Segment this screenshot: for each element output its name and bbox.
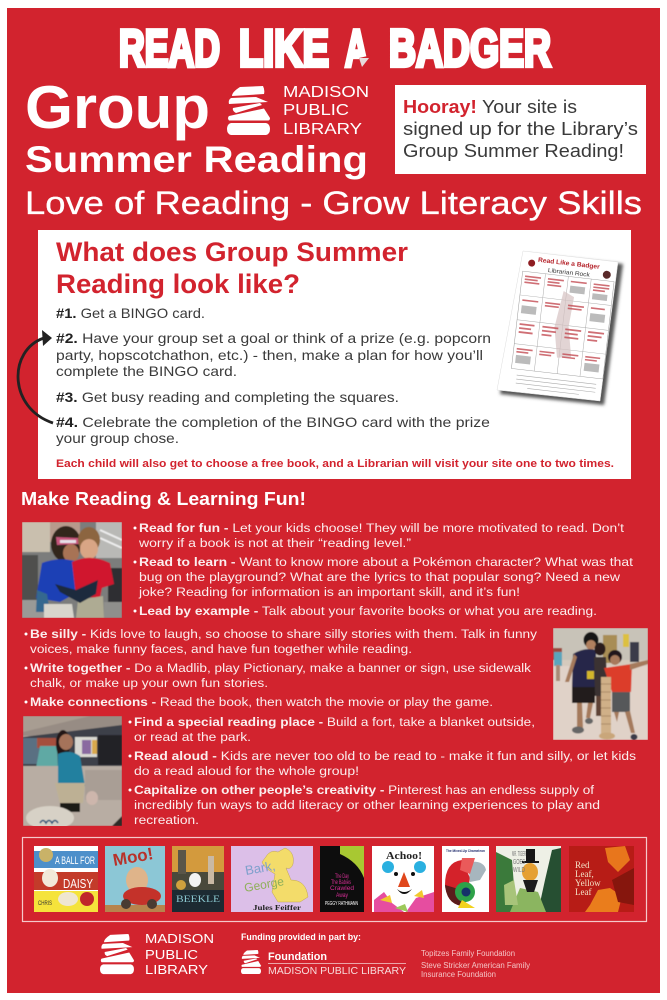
logo: Madison Public Library: LIBRARY xyxy=(283,121,362,138)
logo: Library Foundation: Foundation xyxy=(268,951,327,963)
book: Beekle: BEEKLE xyxy=(176,894,221,904)
callout: Hooray: Hooray! Your site is xyxy=(403,96,577,117)
book: Moo! xyxy=(105,844,165,912)
item: capitalize on creativity xyxy=(128,783,600,827)
item: be silly: Be silly - Kids love to laugh, so choose to share silly stories with them. Talk in funny xyxy=(30,627,538,641)
step 4: your group chose. xyxy=(56,431,179,446)
book: Mr. Tiger Goes Wild xyxy=(496,846,561,912)
item: be silly xyxy=(24,627,538,656)
heading: Summer Reading: Summer Reading xyxy=(25,139,368,180)
photo: kids with block tower xyxy=(553,628,648,740)
title: LIKE xyxy=(239,20,329,78)
funders list xyxy=(421,949,530,979)
list: read for fun, learn, lead xyxy=(134,521,634,618)
title: READ xyxy=(119,20,220,78)
logo: Madison Public Library: MADISON xyxy=(283,84,369,101)
item: read aloud: Read aloud - Kids are never too old to be read to - make it fun and silly, or let kids xyxy=(134,749,636,763)
item: write together xyxy=(24,661,532,690)
funders list: Steve Stricker American Family xyxy=(421,961,530,970)
item: read to learn xyxy=(134,555,634,599)
logo: footer Madison Public Library: MADISON xyxy=(145,931,214,946)
book: Red Leaf, Yellow Leaf xyxy=(569,846,634,912)
book: A Ball for Daisy: CHRIS xyxy=(38,901,52,907)
item: write together: Write together - Do a Madlib, play Pictionary, make a banner or sign, use sidewalk xyxy=(30,661,532,675)
book: The Mixed-Up Chameleon xyxy=(442,846,489,912)
funders list: Topitzes Family Foundation xyxy=(421,949,515,958)
book: The Day the Babies Crawled Away xyxy=(320,846,364,912)
book: A Ball for Daisy: A BALL FOR xyxy=(55,855,95,867)
book: Red Leaf, Yellow Leaf: Leaf, xyxy=(575,869,594,879)
book: The Day the Babies Crawled Away: The Day xyxy=(335,873,349,880)
item: read for fun: worry if a book is not at their “reading level.” xyxy=(138,536,411,550)
callout: Hooray: signed up for the Library’s xyxy=(403,118,638,139)
book: Beekle xyxy=(172,846,224,912)
book: A Ball for Daisy: DAISY xyxy=(63,876,93,891)
book: The Day the Babies Crawled Away: Crawled xyxy=(330,885,354,892)
item: capitalize on creativity: Capitalize on other people’s creativity - Pinterest has an endless supply of xyxy=(134,783,595,797)
logo: footer Madison Public Library: PUBLIC xyxy=(145,947,198,962)
book: Bark, George xyxy=(231,846,313,912)
logo: Madison Public Library: PUBLIC xyxy=(283,102,349,119)
bingo card illustration: Librarian Rock xyxy=(548,268,591,279)
book: Achoo!: Achoo! xyxy=(386,850,422,862)
item: lead by example: Lead by example - Talk about your favorite books or what you are reading. xyxy=(139,604,597,618)
step 4: #4. Celebrate the completion of the BINGO card with the prize xyxy=(56,415,490,430)
bingo card illustration: Read Like a Badger xyxy=(538,257,601,271)
logo: footer Madison Public Library xyxy=(100,931,214,977)
book: Bark, George: Jules Feiffer xyxy=(253,904,301,912)
title: A xyxy=(345,20,368,78)
book: Moo!: Moo! xyxy=(111,844,155,870)
funding label: Funding provided in part by: xyxy=(241,932,361,942)
item: capitalize on creativity: recreation. xyxy=(134,813,199,827)
item: read to learn: bug on the playground? What are the lyrics to that popular song? Need a new xyxy=(139,570,620,584)
item: make connections: Make connections - Read the book, then watch the movie or play the game. xyxy=(30,695,493,709)
panel heading: Reading look like? xyxy=(56,269,300,299)
tagline: Love of Reading - Grow Literacy Skills xyxy=(25,185,642,221)
funders list: Insurance Foundation xyxy=(421,970,496,979)
item: be silly: voices, make funny faces, and have fun together while reading. xyxy=(30,642,412,656)
item: read for fun: Read for fun - Let your kids choose! They will be more motivated to read. Don’t xyxy=(139,521,625,535)
item: find a special reading place xyxy=(128,715,535,744)
book: The Day the Babies Crawled Away: Away xyxy=(336,892,349,899)
heading: Group: Group xyxy=(25,74,210,141)
panel: what does it look like xyxy=(38,230,631,479)
book: Bark, George: George xyxy=(243,874,285,895)
panel: book covers xyxy=(22,838,646,922)
step 2 xyxy=(56,331,491,379)
logo: Library Foundation: MADISON PUBLIC LIBRARY xyxy=(268,966,406,977)
step 4 xyxy=(56,415,490,446)
book: Mr. Tiger Goes Wild: WILD xyxy=(513,867,525,874)
book: Mr. Tiger Goes Wild: GOES xyxy=(513,859,525,866)
logo: Library Foundation xyxy=(241,950,406,977)
item: read aloud xyxy=(128,749,636,778)
callout: Hooray: Group Summer Reading! xyxy=(403,140,624,161)
book: Bark, George: Bark, xyxy=(244,858,276,878)
logo: footer Madison Public Library: LIBRARY xyxy=(145,962,208,977)
item: read to learn: Read to learn - Want to know more about a Pokémon character? What was that xyxy=(139,555,634,569)
book: Mr. Tiger Goes Wild: MR. TIGER xyxy=(512,851,526,858)
title xyxy=(119,20,551,78)
book: Red Leaf, Yellow Leaf: Yellow xyxy=(575,878,601,888)
item: find a special reading place: Find a special reading place - Build a fort, take a blanket outside, xyxy=(134,715,535,729)
book: The Mixed-Up Chameleon: The Mixed-Up Chameleon xyxy=(446,848,485,853)
panel footnote: Each child will also get to choose a free book, and a Librarian will visit your site one to two times. xyxy=(56,458,614,470)
panel heading xyxy=(56,237,408,299)
step 2: party, hopscotchathon, etc.) - then, make a plan for how you’ll xyxy=(56,348,483,363)
item: find a special reading place: or read at the park. xyxy=(134,730,251,744)
book: Red Leaf, Yellow Leaf: Leaf xyxy=(575,887,591,897)
title: BADGER xyxy=(389,20,551,78)
book: The Day the Babies Crawled Away: The Babies xyxy=(331,879,351,886)
logo: Madison Public Library xyxy=(227,84,369,138)
book: Red Leaf, Yellow Leaf: Red xyxy=(575,860,590,870)
item: read for fun xyxy=(134,521,625,550)
list: place, aloud, capitalize xyxy=(128,715,636,827)
arrow: loop from step 4 back to step 2 xyxy=(18,330,53,423)
step 3: #3. Get busy reading and completing the squares. xyxy=(56,390,399,405)
step 2: complete the BINGO card. xyxy=(56,364,237,379)
step 1: #1. Get a BINGO card. xyxy=(56,306,205,321)
book: Achoo! xyxy=(372,846,434,912)
bingo card illustration xyxy=(497,251,623,405)
item: capitalize on creativity: incredibly fun ways to add literacy or other learning experiences to play and xyxy=(134,798,600,812)
book: A Ball for Daisy xyxy=(34,846,98,912)
step 2: #2. Have your group set a goal or think of a prize (e.g. popcorn xyxy=(56,331,491,346)
panel heading: What does Group Summer xyxy=(56,237,408,267)
photo: two kids reading xyxy=(22,522,122,618)
photo: girl in reading room xyxy=(23,716,122,830)
list: silly, write, connect xyxy=(24,627,538,709)
item: read to learn: joke? Reading for information is an important skill, and it’s fun! xyxy=(138,585,520,599)
book: The Day the Babies Crawled Away: PEGGY RATHMANN xyxy=(325,901,358,907)
section heading: make reading fun: Make Reading & Learning Fun! xyxy=(21,489,306,509)
item: write together: chalk, or make up your own fun stories. xyxy=(30,676,268,690)
callout: Hooray xyxy=(395,85,646,174)
item: read aloud: do a read aloud for the whole group! xyxy=(134,764,359,778)
